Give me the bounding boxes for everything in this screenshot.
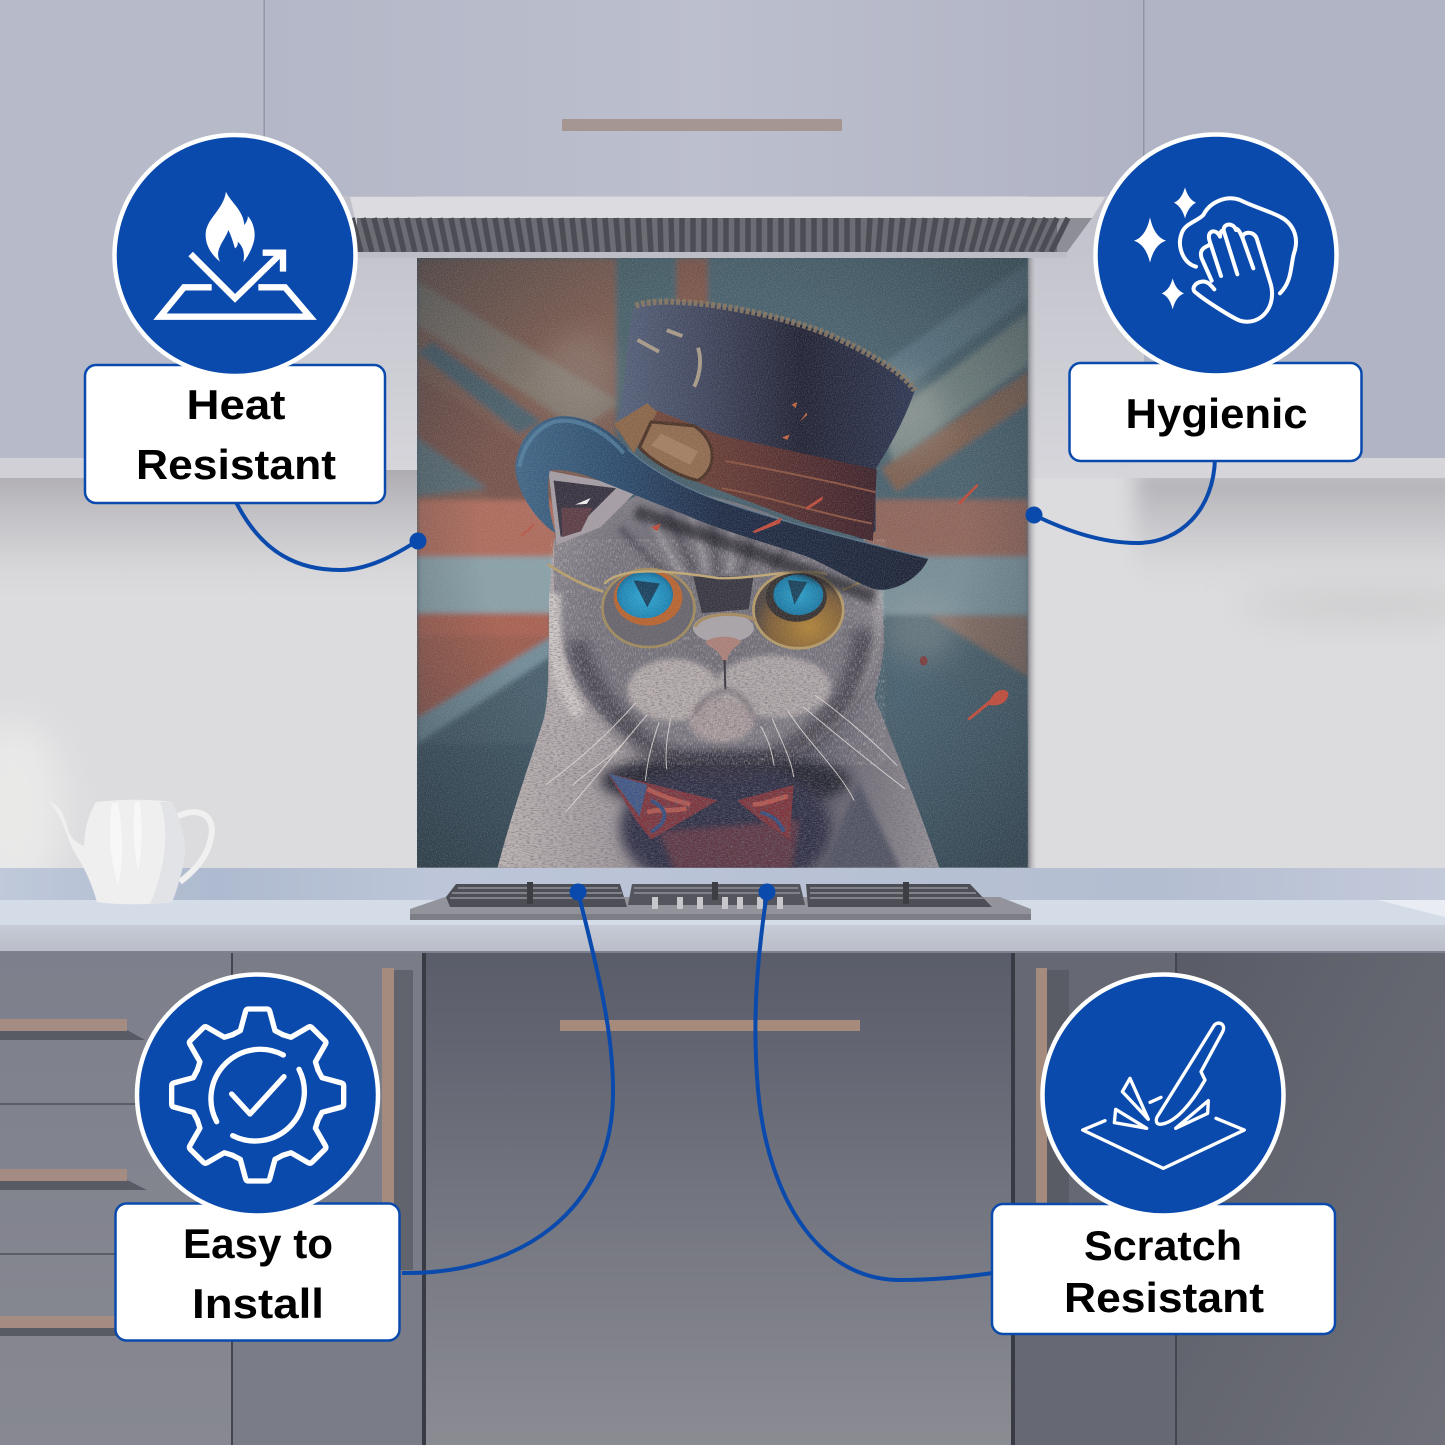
connector line (755, 892, 993, 1280)
cat ear (549, 471, 639, 545)
connector dot (1026, 506, 1042, 524)
icon disc (1042, 974, 1284, 1216)
texture grain (417, 258, 1029, 870)
cat facial shading (553, 512, 880, 765)
teapot (48, 800, 212, 904)
hat band (616, 408, 877, 541)
artwork panel: cat in top hat on Union Jack (417, 258, 1029, 894)
lower cabinets (0, 952, 1445, 1445)
whiskers (546, 695, 905, 812)
connector dot (410, 532, 426, 550)
flag background (417, 258, 1029, 870)
cat body and head silhouette (497, 488, 940, 894)
icon: gear with checkmark (172, 1009, 344, 1181)
hat crown (616, 302, 915, 539)
cooker hood (350, 197, 1105, 258)
callout: Easy to Install (116, 884, 613, 1340)
shelf undersides (0, 458, 1445, 478)
label box (116, 1204, 400, 1340)
cat nose and mouth (693, 576, 754, 715)
paint splatter (520, 484, 1008, 721)
wall backsplash (0, 196, 1445, 900)
label text: Heat (186, 381, 286, 428)
connector line (235, 500, 417, 570)
icon disc (1096, 134, 1336, 376)
hob (410, 882, 1031, 920)
icon: flame over surface with deflecting arrow (160, 192, 310, 317)
icon: knife scratching surface (1083, 1023, 1244, 1168)
label box (85, 365, 385, 503)
callout: Scratch Resistant: Resistant (1064, 1274, 1264, 1321)
label text: Hygienic (1126, 390, 1308, 437)
hat shadow on forehead (636, 512, 874, 598)
bow tie (608, 773, 794, 840)
top hat (515, 302, 928, 598)
worktop (0, 868, 1445, 953)
icon disc (114, 135, 356, 376)
cabinet handles: lower (0, 968, 1069, 1336)
label text: Scratch (1084, 1222, 1242, 1269)
callout: Hygienic (1026, 134, 1362, 543)
hat brim (515, 416, 928, 590)
connector line (402, 892, 613, 1273)
fur texture (497, 488, 940, 870)
hat buckle (614, 403, 712, 480)
connector line (1034, 458, 1215, 543)
glasses and eyes (548, 564, 874, 648)
connector dot (758, 884, 776, 900)
icon: hand wiping with sparkles (1134, 187, 1296, 322)
label box (992, 1204, 1335, 1334)
callout: Heat Resistant: Resistant (136, 441, 336, 488)
label text: Easy to (183, 1220, 333, 1267)
upper cabinets (0, 0, 1445, 458)
connector dot (570, 884, 586, 900)
icon disc (137, 974, 378, 1216)
cabinet handle: upper (562, 119, 842, 131)
label box (1070, 363, 1362, 461)
callout: Scratch Resistant (755, 884, 1335, 1334)
callout: Heat Resistant (85, 135, 426, 570)
callout: Easy to Install: Install (192, 1280, 324, 1327)
